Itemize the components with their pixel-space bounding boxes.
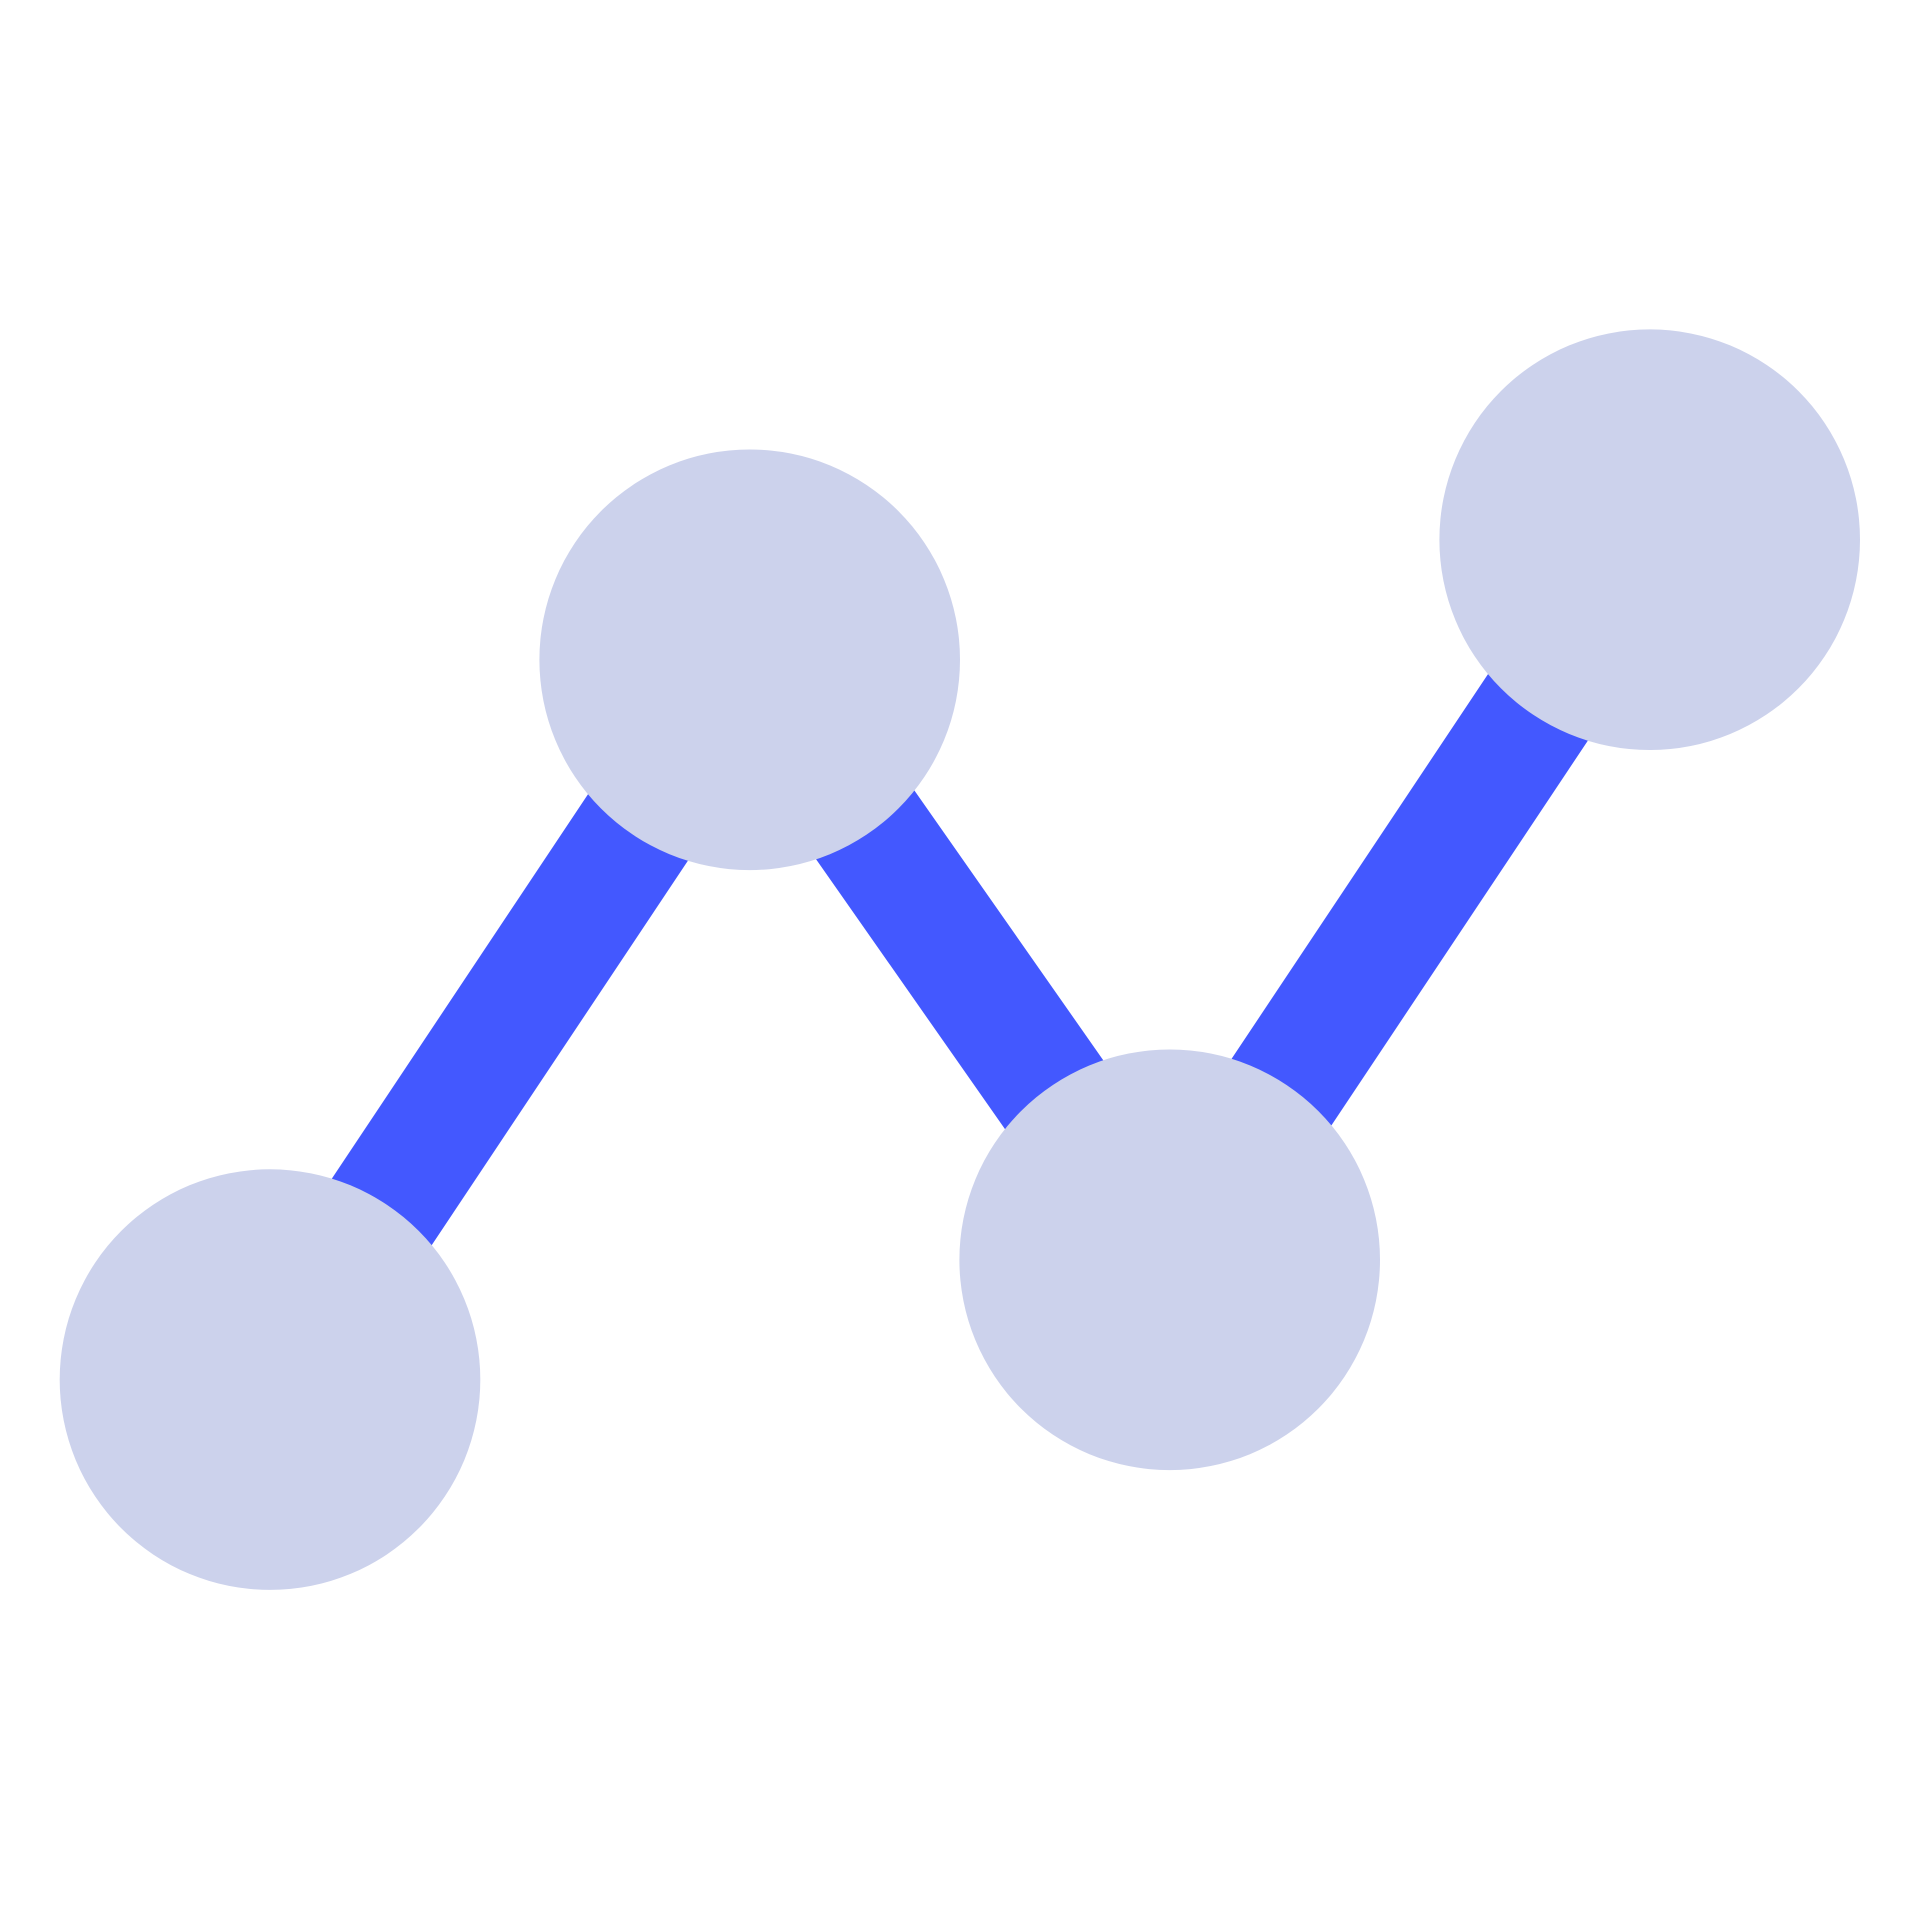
connecting line: first to second node [270,660,750,1380]
connecting line: third to fourth node [1170,540,1650,1260]
data point: first node [60,1169,480,1590]
connecting line: second to third node [750,660,1170,1260]
data point: third node [959,1050,1380,1470]
data point: fourth node [1439,329,1860,750]
data point: second node [539,450,960,870]
